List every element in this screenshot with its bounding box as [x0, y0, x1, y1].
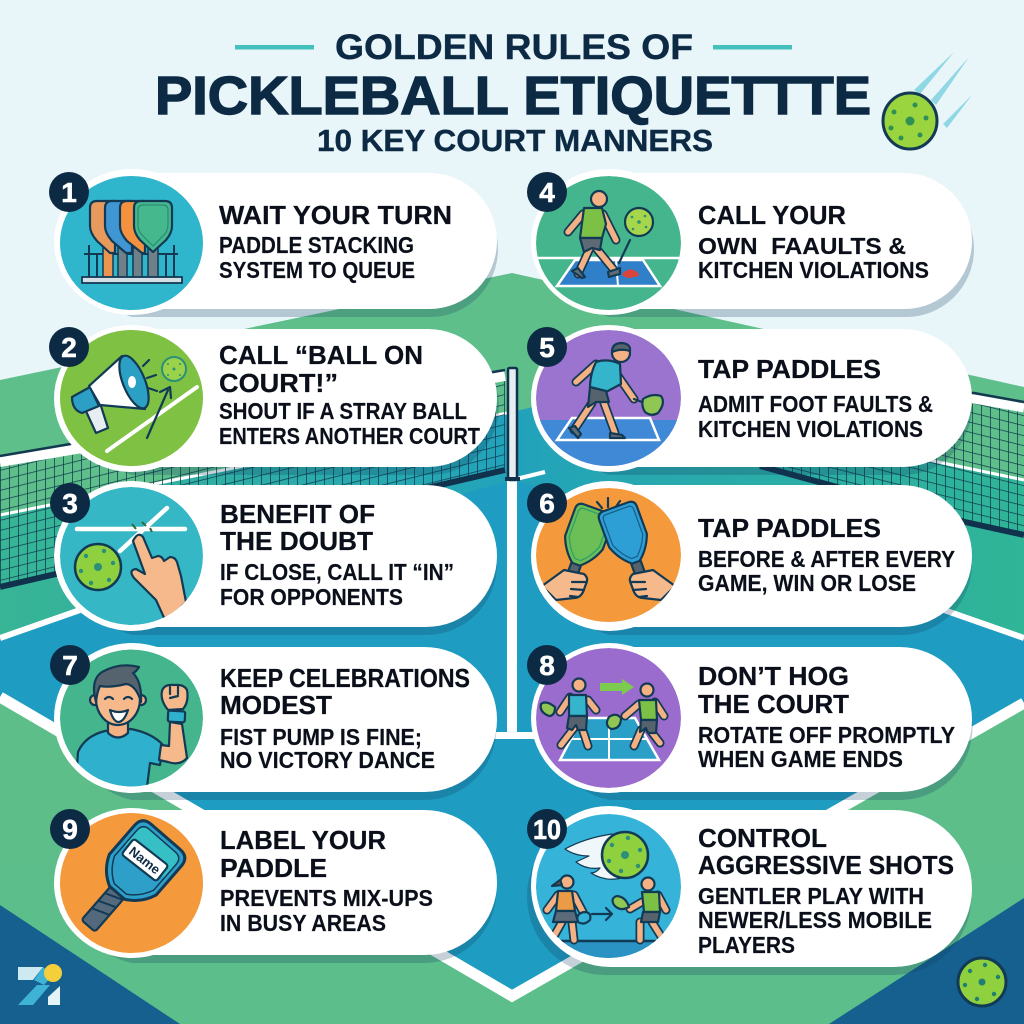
background: teal kitchen zone — [0, 391, 1024, 995]
icon: megaphone and ball — [60, 330, 203, 466]
card shadow — [556, 337, 972, 475]
number badge 10: 10 — [533, 814, 561, 845]
body line 2: KITCHEN VIOLATIONS — [698, 416, 923, 442]
white pill — [532, 647, 972, 792]
icon: players rotating off the court — [536, 648, 681, 788]
icon ring — [54, 808, 210, 958]
icon: paddle with name tag: Name — [126, 844, 163, 877]
heading: TAP PADDLES — [698, 513, 881, 543]
card shadow — [72, 655, 496, 800]
card shadow — [554, 493, 972, 635]
card shadow — [559, 181, 974, 317]
card 3: benefit of the doubt — [50, 481, 497, 635]
icon: two paddles tapping — [536, 488, 681, 622]
heading line 1: LABEL YOUR — [220, 825, 386, 855]
icon: smiling player with fist pump — [60, 650, 203, 795]
white pill — [56, 810, 497, 955]
icon: ball, line and pointing hand — [60, 487, 203, 625]
white pill — [56, 173, 497, 309]
heading line 1: DON’T HOG — [698, 661, 849, 691]
icon ring — [531, 643, 687, 793]
title line 3: 10 KEY COURT MANNERS — [317, 123, 713, 158]
body line 3: PLAYERS — [698, 932, 795, 958]
body line 1: BEFORE & AFTER EVERY — [698, 546, 955, 572]
icon ring — [531, 325, 687, 472]
number badge 9 — [50, 809, 90, 849]
card 5: tap paddles / admit foot faults — [527, 325, 972, 475]
number badge 5: 5 — [539, 332, 555, 363]
card 4: call your own faults — [527, 169, 974, 317]
card shadow — [72, 818, 496, 963]
body line 1: ADMIT FOOT FAULTS & — [698, 391, 933, 417]
icon: flying ball with motion streaks — [883, 52, 972, 149]
card 6: tap paddles before and after — [527, 481, 972, 635]
body line 1: PADDLE STACKING — [219, 232, 414, 258]
heading: TAP PADDLES — [698, 354, 881, 384]
background: bottom-right dark corner — [829, 898, 1024, 1024]
number badge 3 — [50, 483, 90, 523]
body line 2: NO VICTORY DANCE — [220, 747, 435, 773]
number badge 10 — [527, 809, 567, 849]
heading line 2: THE COURT — [698, 689, 849, 719]
body line 1: ROTATE OFF PROMPTLY — [698, 722, 955, 748]
card shadow — [527, 818, 972, 975]
heading line 2: COURT!” — [219, 368, 338, 398]
background: bottom-left dark corner — [0, 905, 180, 1024]
icon: player stepping on kitchen line — [530, 176, 690, 310]
heading: WAIT YOUR TURN — [219, 200, 452, 230]
card 1: wait your turn — [49, 169, 498, 317]
heading line 2: PADDLE — [220, 853, 327, 883]
icon ring — [54, 643, 210, 793]
body line 1: SHOUT IF A STRAY BALL — [219, 398, 467, 424]
number badge 2 — [49, 327, 89, 367]
number badge 1 — [49, 172, 89, 212]
background: blue court — [0, 480, 1024, 995]
number badge 2: 2 — [61, 332, 77, 363]
icon: corner pickleball — [958, 958, 1006, 1006]
heading line 1: CALL “BALL ON — [219, 340, 423, 370]
heading: CALL YOUR — [698, 200, 846, 230]
card 9: label your paddle — [50, 808, 497, 963]
number badge 8: 8 — [539, 650, 555, 681]
number badge 6 — [527, 483, 567, 523]
heading line 1: KEEP CELEBRATIONS — [220, 663, 470, 693]
card 10: control aggressive shots — [527, 806, 972, 975]
number badge 4 — [527, 172, 567, 212]
card 7: keep celebrations modest — [50, 643, 497, 800]
number badge 1: 1 — [61, 177, 77, 208]
body line 2: IN BUSY AREAS — [220, 910, 386, 936]
number badge 6: 6 — [539, 488, 555, 519]
number badge 8 — [527, 645, 567, 685]
title block — [155, 28, 871, 158]
net: left side — [0, 370, 505, 587]
white pill — [56, 485, 497, 627]
card shadow — [77, 493, 497, 635]
body line 2: FOR OPPONENTS — [220, 584, 403, 610]
icon: paddle stack rack — [60, 176, 203, 310]
number badge 3: 3 — [62, 488, 78, 519]
background: green court surround — [0, 273, 1024, 1024]
body line 1: PREVENTS MIX-UPS — [220, 885, 433, 911]
decorative title dash left — [235, 45, 314, 50]
card 2: call ball on court — [49, 325, 499, 475]
icon ring — [54, 325, 210, 472]
background: court lines — [0, 391, 1024, 996]
body line 2: KITCHEN VIOLATIONS — [698, 257, 929, 283]
icon ring — [531, 806, 687, 966]
body line 1: IF CLOSE, CALL IT “IN” — [220, 559, 454, 585]
net post — [505, 368, 520, 481]
heading line 1: BENEFIT OF — [220, 499, 375, 529]
body line 1: GENTLER PLAY WITH — [698, 883, 924, 909]
white pill — [532, 485, 972, 627]
body line 2: SYSTEM TO QUEUE — [219, 257, 415, 283]
body line 2: GAME, WIN OR LOSE — [698, 570, 916, 596]
body line 2: ENTERS ANOTHER COURT — [219, 423, 480, 449]
title line 1: GOLDEN RULES OF — [335, 28, 693, 67]
body line 1: FIST PUMP IS FINE; — [220, 724, 422, 750]
card shadow — [82, 181, 498, 317]
icon ring — [54, 169, 210, 315]
white pill — [532, 810, 972, 967]
number badge 7 — [50, 645, 90, 685]
card shadow — [549, 655, 972, 800]
heading line 2: THE DOUBT — [220, 526, 373, 556]
card shadow — [79, 337, 499, 475]
white pill — [56, 329, 497, 467]
heading line 1: CONTROL — [698, 823, 827, 853]
icon ring — [531, 169, 687, 315]
title line 2: PICKLEBALL ETIQUETTTE — [155, 66, 871, 126]
logo mark — [18, 964, 62, 1005]
number badge 9: 9 — [62, 814, 78, 845]
heading line 2: MODEST — [220, 690, 332, 720]
white pill — [532, 173, 972, 309]
body line 2: NEWER/LESS MOBILE — [698, 907, 932, 933]
body line 1: OWN FAAULTS & — [698, 233, 906, 259]
icon ring — [54, 481, 210, 631]
white pill — [532, 329, 972, 467]
white pill — [56, 647, 497, 792]
decorative title dash right — [713, 45, 792, 50]
icon: paddle with name tag — [60, 813, 203, 953]
number badge 7: 7 — [62, 650, 78, 681]
card 8: don't hog the court — [527, 643, 972, 800]
icon ring — [531, 481, 687, 631]
number badge 5 — [527, 327, 567, 367]
number badge 4: 4 — [539, 177, 555, 208]
heading line 2: AGGRESSIVE SHOTS — [698, 850, 954, 880]
icon: player with paddle at court line — [536, 330, 681, 466]
net: right side — [560, 372, 1024, 535]
icon: winged ball and two players — [536, 814, 681, 958]
body line 2: WHEN GAME ENDS — [698, 746, 903, 772]
